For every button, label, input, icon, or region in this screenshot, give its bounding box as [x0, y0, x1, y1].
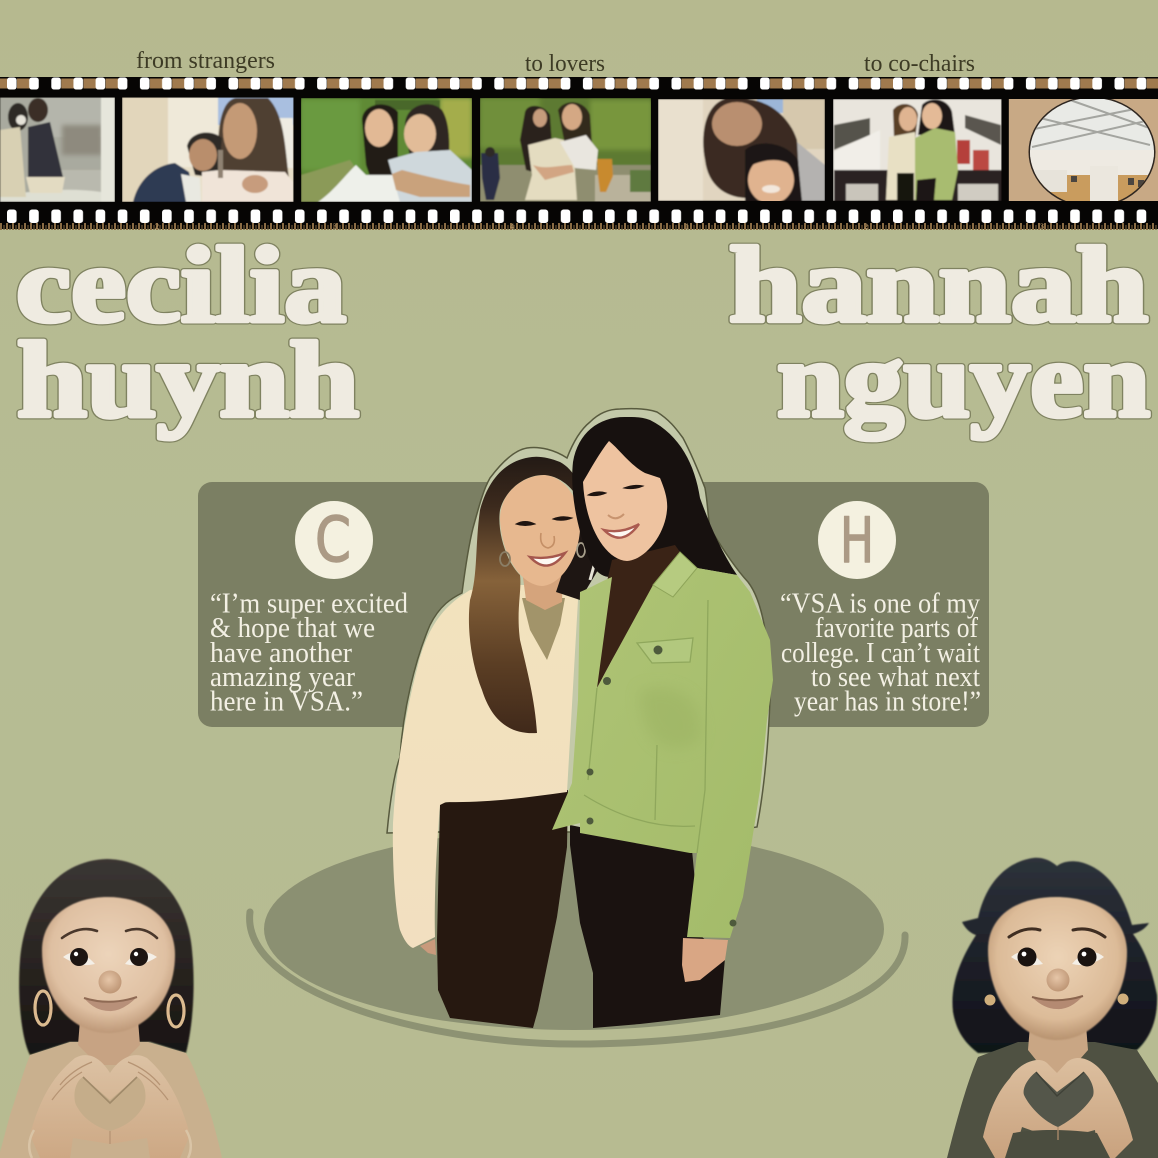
photo cutout: cecilia and hannah [387, 409, 773, 1028]
film strip: 2 [864, 222, 868, 231]
name: hannah nguyen [729, 226, 1150, 440]
name: cecilia huynh: cecilia [16, 226, 346, 345]
name: hannah nguyen: nguyen [777, 321, 1150, 440]
icon: C badge: C [315, 503, 351, 576]
memoji: hannah [947, 858, 1158, 1158]
hannah pants [570, 825, 725, 1028]
hannah face [583, 441, 667, 561]
film strip: 3 [333, 222, 337, 231]
quote: cecilia: here in VSA.” [210, 686, 363, 718]
film strip: 3 [1040, 222, 1044, 231]
name: cecilia huynh: huynh [17, 321, 359, 440]
jacket buttons [586, 646, 736, 926]
podium ellipse [264, 828, 884, 1030]
film strip: 2 [155, 222, 159, 231]
quote: hannah [780, 588, 981, 718]
caption: to co-chairs: to co-chairs [864, 51, 975, 77]
film strip: 4 [510, 222, 514, 231]
name: hannah nguyen: hannah [729, 226, 1148, 345]
hannah memoji hair [952, 858, 1157, 1053]
memoji: cecilia [0, 859, 222, 1158]
quote: hannah: year has in store!” [794, 686, 981, 718]
jacket shading [640, 687, 701, 748]
podium ring arc [250, 912, 905, 1044]
icon: H badge [818, 501, 896, 579]
hannah memoji face [988, 897, 1127, 1040]
cecilia top [522, 598, 565, 660]
film photo 7: round gallery mirror [1009, 96, 1158, 208]
name: hannah nguyen: hannah [729, 226, 1148, 345]
quote: cecilia: amazing year [210, 662, 356, 693]
hair behind faces [556, 490, 598, 600]
jacket pocket and seams [584, 600, 708, 853]
cecilia memoji sweater [0, 1042, 222, 1158]
hannah memoji features [984, 929, 1128, 1009]
icon: H badge: H [840, 504, 874, 577]
hannah hand [682, 938, 728, 982]
cecilia pants [437, 790, 568, 1028]
quote: cecilia: “I’m super excited [210, 588, 408, 620]
film photo 2: leaning heads [122, 97, 294, 202]
quote: cecilia [210, 588, 408, 718]
panel: hannah quote [680, 482, 989, 727]
name: cecilia huynh: cecilia [16, 226, 346, 345]
cecilia memoji hair [19, 859, 194, 1055]
quote: hannah: “VSA is one of my [780, 588, 980, 620]
cecilia memoji heart hands [29, 1055, 191, 1158]
quote: hannah: college. I can’t wait [781, 638, 980, 669]
cecilia memoji face [42, 897, 175, 1033]
hannah collar [653, 552, 697, 597]
hannah face details [588, 485, 643, 538]
name: hannah nguyen: nguyen [777, 321, 1150, 440]
cutout halo [387, 409, 770, 833]
caption: from strangers: from strangers [136, 48, 275, 74]
quote: cecilia: & hope that we [210, 613, 375, 644]
quote: hannah: to see what next [811, 662, 980, 693]
icon: C badge [295, 501, 373, 579]
hannah memoji heart hands [983, 1058, 1133, 1158]
hannah memoji neck [1028, 1025, 1088, 1075]
film photo 4: walking on campus [480, 98, 652, 205]
cecilia face details [500, 517, 597, 580]
film photo 3: selfie in greenery [301, 98, 472, 202]
film photo 6: museum balcony [833, 99, 1002, 201]
hannah jacket [552, 552, 773, 938]
film strip [0, 77, 1158, 231]
panel: cecilia quote [198, 482, 508, 727]
name: cecilia huynh: huynh [17, 321, 359, 440]
hannah hair [572, 417, 737, 577]
film strip: 1 [685, 222, 689, 231]
film photo 5: close-up faces [658, 99, 825, 204]
cecilia memoji neck [78, 1020, 140, 1065]
cecilia hand [420, 939, 436, 955]
cecilia face [500, 475, 580, 586]
film photo 1: mirror selfie [0, 97, 115, 202]
hannah memoji top [947, 1042, 1158, 1158]
hannah turtleneck [597, 545, 680, 688]
cecilia neck [522, 570, 563, 610]
name: cecilia huynh [16, 226, 359, 440]
quote: hannah: favorite parts of [815, 613, 979, 644]
cecilia sweater [393, 585, 578, 948]
cecilia memoji features [35, 929, 184, 1027]
cecilia hair [469, 457, 585, 733]
quote: cecilia: have another [210, 638, 353, 669]
caption: to lovers: to lovers [525, 51, 605, 77]
